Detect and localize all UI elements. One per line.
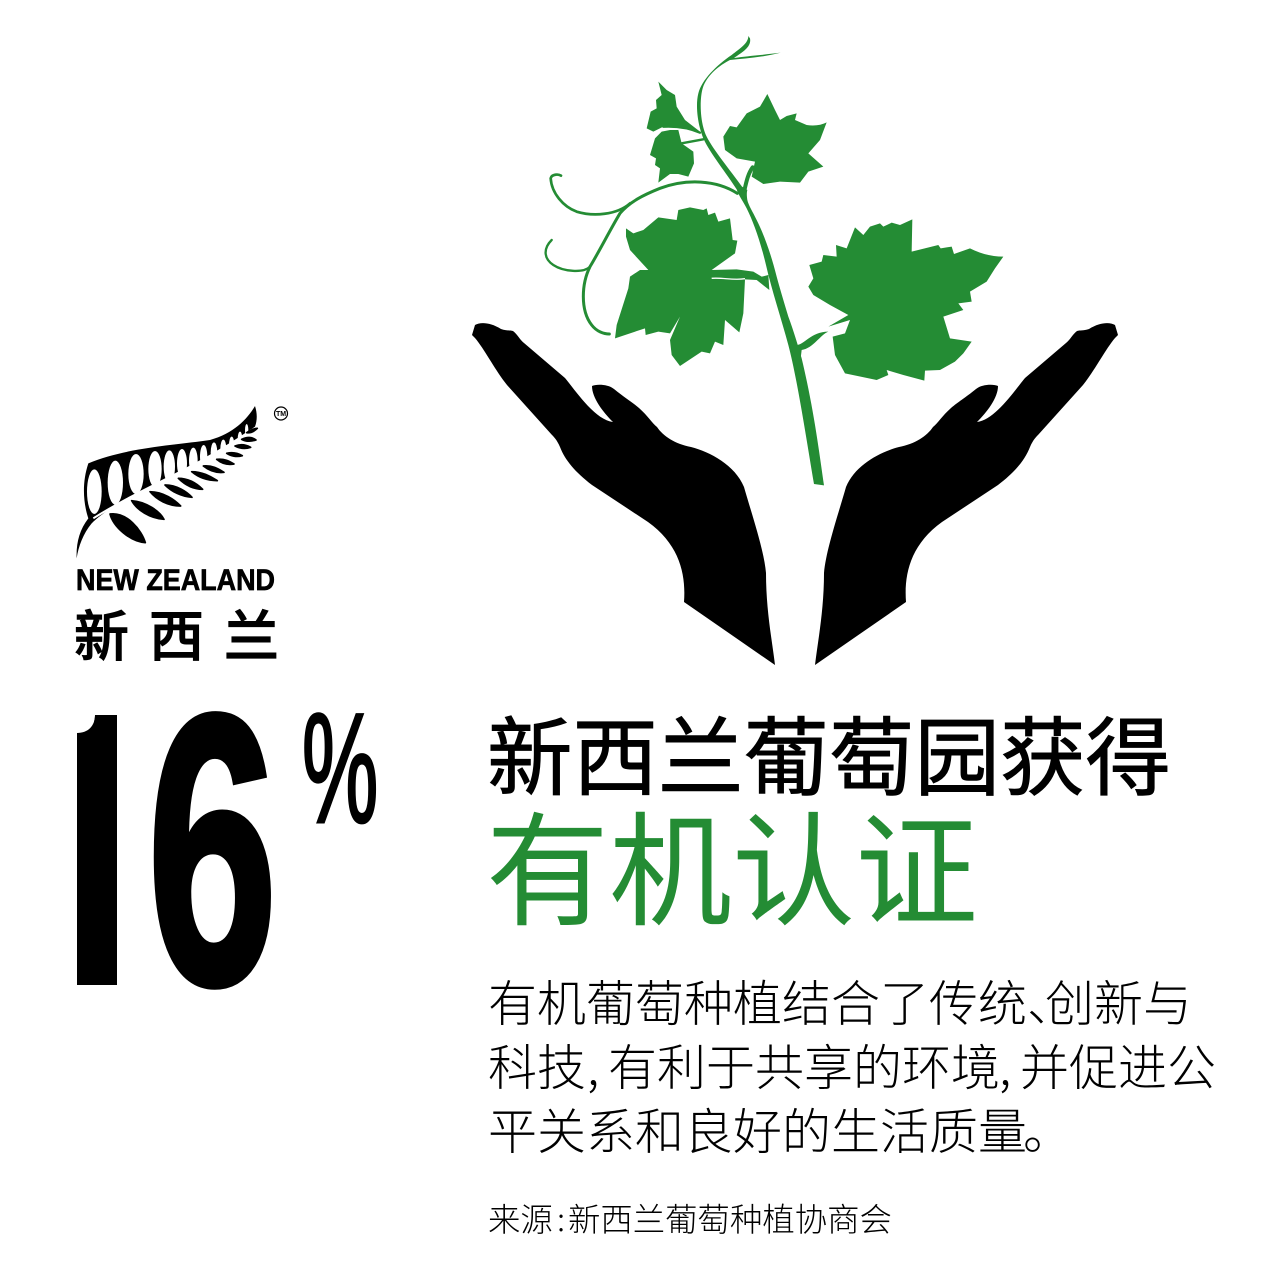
heading line: black: 新西兰葡萄园获得 <box>487 689 1171 813</box>
icon: grape vine <box>546 36 1003 485</box>
percent sign: % <box>302 681 378 855</box>
body line 3: 。 <box>1023 1093 1072 1164</box>
digit 6: 6 <box>147 634 278 1065</box>
logo wordmark: 新西兰: 西 <box>149 592 204 672</box>
body line 2: 并促进公 <box>1020 1029 1216 1100</box>
body line 2: 有利于共享的环境 <box>608 1029 1000 1100</box>
source line: 来源 <box>488 1194 553 1241</box>
logo: New Zealand fern mark <box>74 406 288 672</box>
logo wordmark: 新西兰: 新 <box>74 592 129 672</box>
icon: left hand <box>472 323 775 665</box>
leaf: small top <box>647 82 700 132</box>
icon: silver fern <box>77 406 257 558</box>
body line 2: 科技 <box>488 1029 586 1100</box>
leaf slit: left leaf stalk gap <box>712 278 745 279</box>
body line 1: 创新与 <box>1045 965 1192 1036</box>
leaf stalk right <box>795 332 828 358</box>
leaf: upper right <box>723 94 827 184</box>
logo wordmark: 新西兰: 兰 <box>224 592 279 672</box>
icon: trademark: TM <box>276 411 286 418</box>
source line: : <box>557 1194 565 1241</box>
heading line: green: 有机认证 <box>486 773 978 951</box>
tendrils <box>546 127 753 334</box>
leaf: large left <box>615 207 769 366</box>
leaf: large right <box>808 219 1003 381</box>
logo wordmark: 新西兰 <box>74 592 279 672</box>
heading <box>486 689 1171 951</box>
body line 2: , <box>999 1029 1011 1100</box>
leaf: small lower <box>650 130 694 183</box>
vine main stem <box>697 36 824 485</box>
icon: trademark <box>274 407 288 420</box>
body paragraph <box>488 965 1216 1164</box>
big number: 16% <box>77 711 376 990</box>
body line 2: , <box>587 1029 599 1100</box>
body line 1: 有机葡萄种植结合了传统、 <box>488 965 1076 1036</box>
icon: right hand <box>815 323 1118 665</box>
digit 1: 1 <box>13 632 170 1069</box>
source line: 新西兰葡萄种植协商会 <box>568 1194 892 1241</box>
logo wordmark: NEW ZEALAND: NEW ZEALAND <box>76 564 275 597</box>
body line 3: 平关系和良好的生活质量 <box>488 1093 1027 1164</box>
